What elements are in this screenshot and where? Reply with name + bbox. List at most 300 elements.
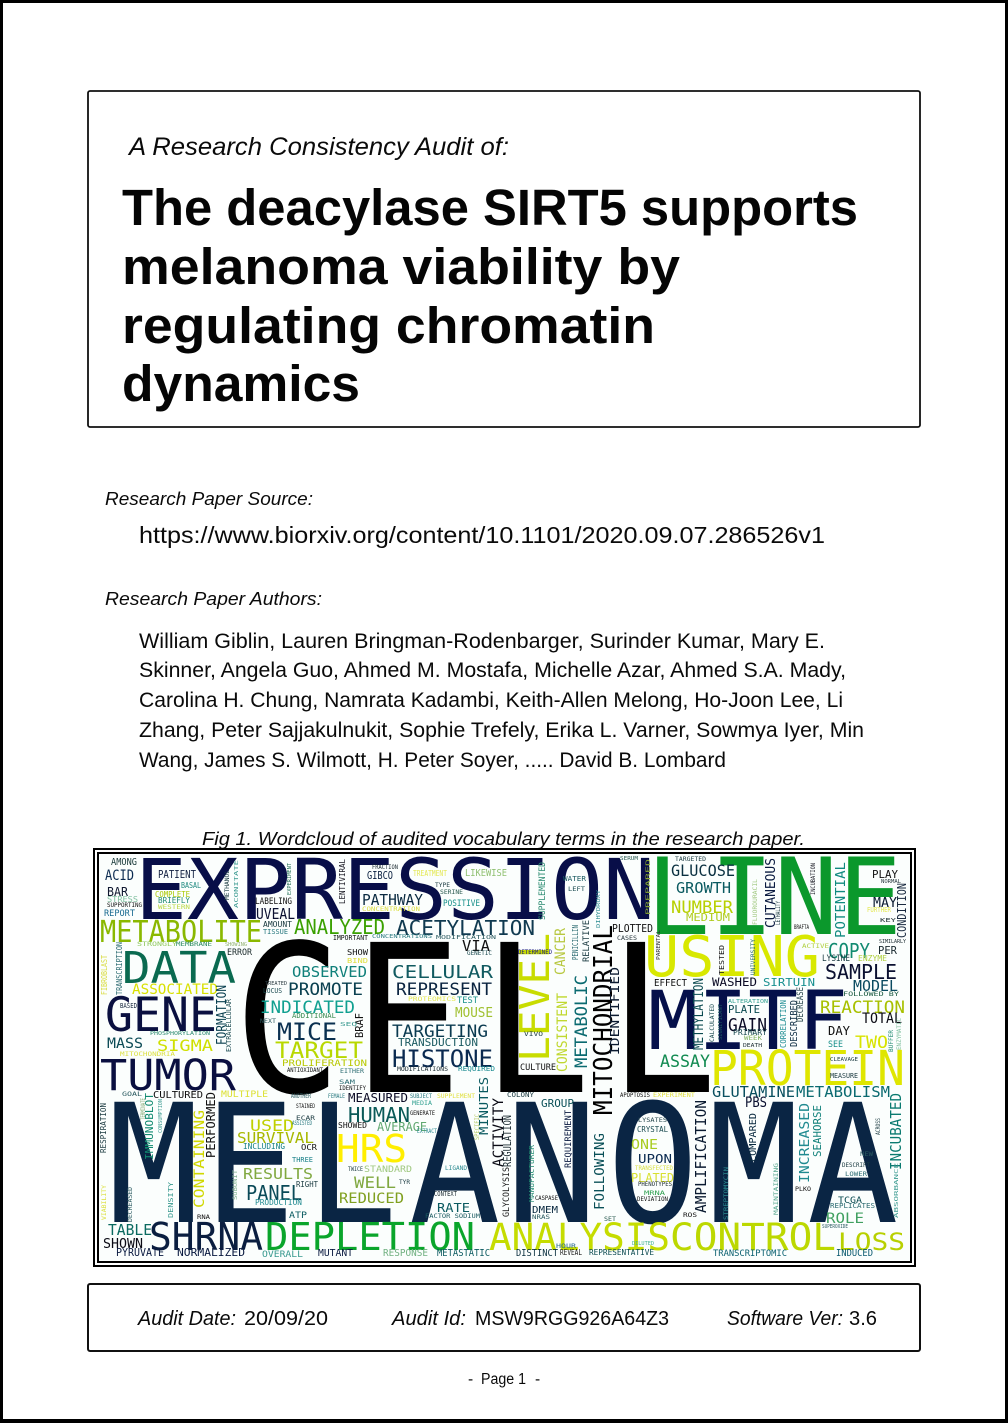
medium horizontal vocabulary terms: OBSERVED — [292, 963, 367, 981]
small vocabulary terms: ANTIOXIDANT — [287, 1066, 323, 1074]
small vocabulary terms: ALTERATION — [728, 999, 768, 1005]
page number: - — [535, 1371, 540, 1388]
medium horizontal vocabulary terms: CRYSTAL — [637, 1125, 668, 1134]
medium horizontal vocabulary terms: POSITIVE — [443, 899, 480, 909]
vertical vocabulary terms: ABSORBANCE — [894, 1163, 900, 1218]
audit date: Audit Date: — [137, 1308, 236, 1330]
small vocabulary terms: TWICE — [348, 1166, 363, 1173]
medium horizontal vocabulary terms: NORMALIZED — [177, 1246, 245, 1259]
medium horizontal vocabulary terms: INDUCED — [836, 1248, 873, 1259]
word: GENE: GENE — [105, 988, 217, 1043]
small vocabulary terms: REPORT — [104, 909, 135, 919]
medium horizontal vocabulary terms: CULTURED — [153, 1090, 203, 1101]
medium horizontal vocabulary terms: TARGETING — [392, 1022, 488, 1042]
medium horizontal vocabulary terms: PER — [878, 944, 897, 957]
word: DATA: DATA — [122, 943, 236, 994]
medium horizontal vocabulary terms: TRANSCRIPTOMIC — [713, 1249, 787, 1259]
medium horizontal vocabulary terms: STANDARD — [364, 1165, 412, 1175]
vertical vocabulary terms: VIABILITY — [101, 1185, 108, 1220]
vertical vocabulary terms: FIBROBLAST — [100, 955, 109, 995]
small vocabulary terms: SUPPLEMENT — [437, 1093, 475, 1100]
small vocabulary terms: ROS — [683, 1212, 697, 1219]
word: CELL: CELL — [233, 901, 717, 1141]
panel: title box — [88, 91, 920, 427]
small vocabulary terms: SHOW — [347, 948, 369, 957]
vertical vocabulary terms: FLUOROURACIL — [751, 879, 759, 925]
medium horizontal vocabulary terms: PROLIFERATION — [282, 1059, 367, 1069]
vertical vocabulary terms: ENZYMATIC — [896, 1018, 903, 1050]
vertical vocabulary terms: RELATIVE — [582, 920, 592, 962]
small vocabulary terms: DEATH — [743, 1043, 762, 1049]
vertical vocabulary terms: GLYCOLYSIS — [502, 1167, 512, 1217]
vertical vocabulary terms: IDENTIFIED — [608, 967, 622, 1055]
medium horizontal vocabulary terms: RNA — [197, 1214, 210, 1221]
small vocabulary terms: AMONG — [111, 857, 137, 868]
small vocabulary terms: AMOUNT — [263, 920, 293, 929]
medium horizontal vocabulary terms: COPY — [828, 939, 870, 963]
vertical vocabulary terms: LENTIVIRAL — [338, 859, 347, 904]
medium horizontal vocabulary terms: PATHWAY — [362, 891, 423, 909]
medium horizontal vocabulary terms: REPRESENTATIVE — [589, 1248, 654, 1257]
small vocabulary terms: STRONGLY — [137, 941, 178, 948]
small vocabulary terms: CLEAVAGE — [830, 1057, 858, 1063]
medium horizontal vocabulary terms: RATE — [437, 1201, 470, 1215]
medium horizontal vocabulary terms: VIA — [462, 937, 490, 955]
small vocabulary terms: FURTHER — [867, 906, 892, 914]
chart: word cloud of audited vocabulary terms — [94, 836, 915, 1266]
small vocabulary terms: WEEK — [744, 1035, 762, 1042]
medium horizontal vocabulary terms: PRODUCTION — [255, 1198, 302, 1207]
small vocabulary terms: ASSISTED — [292, 1120, 312, 1127]
medium horizontal vocabulary terms: DMEM — [532, 1205, 558, 1216]
small vocabulary terms: TREATMENT — [413, 869, 447, 878]
medium horizontal vocabulary terms: TCGA — [838, 1196, 863, 1206]
vertical vocabulary terms: LETHALITY — [775, 901, 782, 925]
word: MITF: MITF — [648, 975, 848, 1069]
small vocabulary terms: TISSUE — [263, 928, 288, 936]
vertical vocabulary terms: METHANOL — [224, 870, 231, 900]
word: MELANOMA: MELANOMA — [108, 1070, 898, 1262]
small vocabulary terms: COMPLETE — [155, 890, 190, 899]
small vocabulary terms: FRACTION — [372, 864, 398, 871]
text: author list: Skinner, Angela Guo, Ahmed M. Mostafa, Michelle Azar, Ahmed S.A. Mady, — [139, 659, 846, 682]
small vocabulary terms: IMPORTANT — [333, 934, 369, 942]
medium horizontal vocabulary terms: GROUP — [541, 1097, 574, 1110]
medium horizontal vocabulary terms: SAMPLE — [825, 960, 897, 984]
medium horizontal vocabulary terms: LYSINE — [822, 954, 850, 964]
panel: audit metadata footer — [88, 1284, 920, 1351]
vertical vocabulary terms: METABOLIC — [572, 975, 592, 1068]
small vocabulary terms: DILUTED — [632, 1241, 654, 1247]
medium horizontal vocabulary terms: MULTIPLE — [221, 1090, 268, 1100]
small vocabulary terms: SEQ — [340, 1022, 357, 1028]
small vocabulary terms: BASAL — [181, 881, 201, 890]
text: author list: Wang, James S. Wilmott, H. Peter Soyer, ..... David B. Lombard — [139, 749, 726, 772]
vertical vocabulary terms: SUBUNIT — [232, 1170, 239, 1200]
label: research paper authors: Research Paper Authors: — [105, 588, 322, 609]
vertical vocabulary terms: COMPARED — [748, 1113, 759, 1162]
medium horizontal vocabulary terms: PANEL — [246, 1181, 302, 1205]
medium horizontal vocabulary terms: OCR — [301, 1143, 317, 1152]
small vocabulary terms: DEVIATION — [637, 1196, 668, 1203]
word: TUMOR: TUMOR — [100, 1051, 236, 1101]
word: EXPRESSION: EXPRESSION — [135, 841, 655, 939]
vertical vocabulary terms: EXTRACELLULAR — [225, 998, 233, 1052]
small vocabulary terms: TRANSFECTED — [635, 1165, 673, 1172]
vertical vocabulary terms: RESPIRATION — [99, 1103, 108, 1153]
audit id: MSW9RGG926A64Z3 — [475, 1308, 669, 1330]
small vocabulary terms: SIMILARLY — [879, 939, 907, 945]
heading: paper title: dynamics — [122, 355, 360, 412]
small vocabulary terms: PHENOTYPES — [638, 1181, 672, 1188]
vertical vocabulary terms: INCREASED — [798, 1103, 813, 1183]
medium horizontal vocabulary terms: ACID — [105, 868, 134, 884]
medium horizontal vocabulary terms: HISTONE — [392, 1045, 493, 1073]
vertical vocabulary terms: PARENTAL — [656, 929, 662, 960]
small vocabulary terms: SUBJECT — [410, 1093, 432, 1100]
small vocabulary terms: WATER — [563, 875, 587, 883]
small vocabulary terms: EITHER — [340, 1068, 364, 1075]
figure caption: Fig 1. Wordcloud of audited vocabulary terms in the research paper. — [202, 828, 805, 849]
word: LOSS: LOSS — [838, 1228, 905, 1256]
small vocabulary terms: TREATED — [265, 981, 287, 987]
medium horizontal vocabulary terms — [103, 861, 905, 1260]
small vocabulary terms: MEASURE — [830, 1072, 858, 1080]
word: CONTROL: CONTROL — [670, 1216, 836, 1259]
medium horizontal vocabulary terms: THREE — [292, 1156, 313, 1164]
medium horizontal vocabulary terms: REDUCED — [339, 1191, 404, 1207]
medium horizontal vocabulary terms: PRIMARY — [733, 1028, 767, 1037]
text: author list — [139, 630, 864, 772]
small vocabulary terms: BIND — [347, 957, 368, 965]
medium horizontal vocabulary terms: GLUCOSE — [671, 861, 735, 880]
medium horizontal vocabulary terms: CELLULAR — [392, 962, 493, 983]
vertical vocabulary terms: BRAF — [353, 1013, 366, 1038]
small vocabulary terms: MODIFICATION — [436, 935, 496, 941]
medium horizontal vocabulary terms: ASSOCIATED — [132, 982, 218, 998]
vertical vocabulary terms: BUFFER — [888, 1030, 895, 1052]
medium horizontal vocabulary terms: MAY — [873, 896, 897, 911]
small vocabulary terms: HOUR — [556, 1243, 577, 1250]
small vocabulary terms: SERUM — [620, 856, 639, 862]
small vocabulary terms: GENETIC — [467, 950, 492, 957]
medium horizontal vocabulary terms: MEDIUM — [686, 911, 730, 924]
subtitle: audit label: A Research Consistency Audit of: — [127, 133, 509, 161]
medium horizontal vocabulary terms: TABLE — [108, 1221, 152, 1239]
small vocabulary terms: LYSATES — [638, 1116, 667, 1124]
word: HRS: HRS — [336, 1127, 407, 1171]
page number — [468, 1371, 540, 1388]
small vocabulary terms: STRESS — [107, 895, 138, 904]
vertical vocabulary terms: CUTANEOUS — [764, 858, 779, 928]
medium horizontal vocabulary terms: PATIENT — [158, 868, 196, 881]
small vocabulary terms: MITOCHONDRIA — [120, 1050, 175, 1058]
medium horizontal vocabulary terms: COLONY — [507, 1091, 535, 1099]
medium horizontal vocabulary terms: PLAY — [872, 868, 898, 881]
vertical vocabulary terms: EXPERIMENT — [287, 862, 293, 895]
small vocabulary terms: MODIFICATIONS — [397, 1066, 448, 1073]
word: METABOLITE: METABOLITE — [100, 915, 262, 950]
audit id: Audit Id: — [391, 1308, 466, 1330]
vertical vocabulary terms: TERMINATE — [140, 1098, 147, 1120]
medium horizontal vocabulary terms: RESPONSE — [383, 1248, 428, 1259]
medium horizontal vocabulary terms: ROLE — [826, 1211, 864, 1227]
page number: - — [468, 1371, 473, 1388]
small vocabulary terms: NEW — [860, 1151, 873, 1158]
medium horizontal vocabulary terms: ACETYLATION — [396, 916, 535, 940]
medium horizontal vocabulary terms: PYRUVATE — [116, 1246, 164, 1259]
medium horizontal vocabulary terms: BAR — [107, 885, 129, 899]
medium horizontal vocabulary terms: SHOWED — [338, 1121, 367, 1130]
vertical vocabulary terms: FOLLOWING — [593, 1133, 608, 1210]
medium horizontal vocabulary terms: SIGMA — [157, 1036, 213, 1055]
vertical vocabulary terms: DENSITY — [167, 1181, 175, 1218]
small vocabulary terms: BASED — [120, 1002, 137, 1010]
small vocabulary terms: ADDITIONAL — [292, 1012, 336, 1020]
word: USING: USING — [644, 925, 820, 990]
medium horizontal vocabulary terms: MASS — [107, 1036, 143, 1052]
medium horizontal vocabulary terms: SIRTUIN — [763, 976, 815, 989]
heading: paper title — [122, 179, 858, 412]
small vocabulary terms: EXTRACT — [417, 1128, 437, 1135]
small vocabulary terms: MEDIA — [412, 1099, 432, 1107]
medium horizontal vocabulary terms: PROMOTE — [288, 980, 363, 1000]
medium horizontal vocabulary terms: RIGHT — [296, 1180, 318, 1189]
small vocabulary terms: PLKO — [795, 1186, 811, 1193]
word: LINE: LINE — [646, 836, 902, 959]
vertical vocabulary terms: SIGNIFICANT — [718, 1003, 724, 1040]
medium horizontal vocabulary terms: GIBCO — [367, 869, 393, 882]
small vocabulary terms: LOWER — [845, 1171, 867, 1178]
vertical vocabulary terms: DIHYDROXY — [596, 889, 602, 928]
medium horizontal vocabulary terms: RESULTS — [243, 1165, 313, 1183]
medium horizontal vocabulary terms: ANALYZED — [294, 915, 385, 939]
medium horizontal vocabulary terms: ENZYME — [858, 954, 887, 963]
medium horizontal vocabulary terms: METABOLISM — [796, 1083, 890, 1101]
small vocabulary terms: SAM — [339, 1078, 355, 1086]
medium horizontal vocabulary terms: AVERAGE — [377, 1120, 427, 1134]
small vocabulary terms: DETERMINED — [518, 949, 552, 956]
word: MITOCHONDRIAL: MITOCHONDRIAL — [589, 925, 619, 1115]
small vocabulary terms — [104, 856, 907, 1250]
vertical vocabulary terms: REQUIREMENT — [564, 1109, 574, 1168]
word: LEVEL: LEVEL — [511, 933, 559, 1062]
small vocabulary terms: BRIEFLY — [158, 896, 190, 905]
small vocabulary terms: CONCENTRATION — [362, 905, 420, 913]
software version: 3.6 — [849, 1308, 877, 1330]
medium horizontal vocabulary terms: MOUSE — [455, 1006, 493, 1021]
medium horizontal vocabulary terms: MODEL — [853, 977, 898, 995]
medium horizontal vocabulary terms: GLUTAMINE — [712, 1083, 795, 1101]
medium horizontal vocabulary terms: UVEAL — [256, 905, 295, 923]
medium horizontal vocabulary terms: CULTURE — [520, 1063, 556, 1073]
small vocabulary terms: EXPERIMENT — [653, 1091, 695, 1099]
vertical vocabulary terms: AMPLIFICATION — [692, 1100, 710, 1213]
vertical vocabulary terms: SUPPLEMENTED — [538, 862, 548, 920]
medium horizontal vocabulary terms: ASSAY — [660, 1052, 710, 1072]
medium horizontal vocabulary terms: OVERALL — [262, 1250, 303, 1260]
medium horizontal vocabulary terms: TOTAL — [862, 1011, 902, 1027]
text: author list: William Giblin, Lauren Bringman-Rodenbarger, Surinder Kumar, Mary E. — [139, 630, 825, 653]
small vocabulary terms: MRNA — [644, 1190, 666, 1197]
small vocabulary terms: SUPPORTING — [107, 901, 142, 909]
medium horizontal vocabulary terms: GAIN — [728, 1015, 767, 1036]
medium horizontal vocabulary terms: REVEAL — [560, 1248, 582, 1257]
small vocabulary terms: NORMAL — [881, 879, 902, 885]
vertical vocabulary terms: TESTED — [718, 945, 726, 975]
audit date: 20/09/20 — [244, 1308, 328, 1330]
vertical vocabulary terms — [99, 858, 909, 1222]
medium horizontal vocabulary terms: NUMBER — [671, 898, 734, 918]
vertical vocabulary terms: STREPTOMYCIN — [723, 1167, 730, 1220]
medium horizontal vocabulary terms: INCLUDING — [243, 1142, 285, 1151]
small vocabulary terms: BRAFTA — [794, 924, 809, 931]
small vocabulary terms: LEFT — [568, 885, 585, 893]
small vocabulary terms: MEMBRANE — [176, 941, 212, 948]
small vocabulary terms: PROTEOMICS — [408, 995, 456, 1003]
medium horizontal vocabulary terms: PLATE — [728, 1003, 760, 1016]
vertical vocabulary terms: CONDITION — [895, 883, 909, 938]
vertical vocabulary terms: PERFORMED — [204, 1092, 218, 1158]
small vocabulary terms: FOLLOWED BY — [843, 991, 900, 998]
medium horizontal vocabulary terms: SURVIVAL — [237, 1129, 314, 1147]
vertical vocabulary terms: PREPARED — [644, 859, 652, 915]
vertical vocabulary terms: DESCRIBED — [789, 1000, 800, 1047]
medium horizontal vocabulary terms: ERROR — [227, 948, 253, 958]
small vocabulary terms: DESCRIPT — [842, 1162, 870, 1169]
medium horizontal vocabulary terms: REPRESENT — [396, 980, 492, 1000]
medium horizontal vocabulary terms: SEE — [828, 1040, 843, 1050]
small vocabulary terms: REQUIRED — [458, 1065, 495, 1073]
vertical vocabulary terms: DECREASED — [127, 1187, 134, 1222]
medium horizontal vocabulary terms: REACTION — [820, 998, 905, 1018]
medium horizontal vocabulary terms: PLOTTED — [612, 922, 653, 935]
medium horizontal vocabulary terms: MUTANT — [318, 1248, 353, 1259]
medium horizontal vocabulary terms: REPLICATES — [830, 1202, 875, 1210]
medium horizontal vocabulary terms: WELL — [354, 1173, 396, 1192]
small vocabulary terms: CASPASE — [535, 1195, 558, 1202]
small vocabulary terms: SUPEROXIDE — [822, 1224, 848, 1230]
small vocabulary terms: APOPTOSIS — [620, 1091, 650, 1099]
vertical vocabulary terms: PENICILLIN — [571, 925, 580, 960]
vertical vocabulary terms: CANCER — [553, 927, 569, 975]
vertical vocabulary terms: UNIVERSITY — [750, 939, 757, 975]
medium horizontal vocabulary terms: DAY — [828, 1024, 851, 1038]
medium horizontal vocabulary terms: WASHED — [712, 975, 757, 989]
small vocabulary terms: CONCENTRATIONS — [372, 934, 432, 940]
vertical vocabulary terms: MAINTAINING — [773, 1163, 780, 1215]
vertical vocabulary terms: REGULATION — [501, 1115, 514, 1167]
vertical vocabulary terms: CONTAINING — [192, 1110, 208, 1208]
small vocabulary terms: TYPE — [435, 882, 450, 889]
vertical vocabulary terms: ACTIVITY — [491, 1097, 507, 1167]
audit id — [391, 1308, 669, 1330]
medium horizontal vocabulary terms: USED — [250, 1116, 294, 1135]
small vocabulary terms: LIGAND — [445, 1165, 467, 1172]
small vocabulary terms: STAINED — [296, 1103, 315, 1110]
medium horizontal vocabulary terms: ONE — [631, 1138, 658, 1153]
medium horizontal vocabulary terms: SHOWN — [103, 1237, 143, 1252]
medium horizontal vocabulary terms: TRANSDUCTION — [398, 1036, 478, 1049]
vertical vocabulary terms: CONSISTENT — [555, 992, 571, 1072]
medium horizontal vocabulary terms: MICE — [277, 1018, 337, 1046]
medium horizontal vocabulary terms: LABELING — [255, 897, 292, 907]
label: research paper source: Research Paper Source: — [105, 488, 313, 509]
medium horizontal vocabulary terms: UPON — [638, 1152, 672, 1166]
medium horizontal vocabulary terms: METASTATIC — [437, 1248, 490, 1259]
medium horizontal vocabulary terms: HUMAN — [348, 1103, 410, 1127]
medium horizontal vocabulary terms: INDICATED — [260, 998, 355, 1018]
medium horizontal vocabulary terms: CONTEXT — [434, 1190, 458, 1198]
small vocabulary terms: TARGETED — [675, 856, 706, 863]
small vocabulary terms: NRAS — [532, 1213, 550, 1221]
text: author list: Zhang, Peter Sajjakulnukit, Sophie Trefely, Erika L. Varner, Sowmya Iyer, Min — [139, 719, 864, 742]
small vocabulary terms: CASES — [617, 935, 637, 942]
vertical vocabulary terms: POTENTIAL — [834, 862, 849, 938]
small vocabulary terms: VIVO — [524, 1030, 543, 1038]
small vocabulary terms: KEY — [880, 918, 897, 924]
vertical vocabulary terms: INCUBATED — [887, 1093, 905, 1170]
software version: Software Ver: — [727, 1308, 843, 1330]
word: ANALYSIS: ANALYSIS — [489, 1216, 670, 1259]
vertical vocabulary terms: ACROSS — [875, 1118, 882, 1135]
medium horizontal vocabulary terms: EFFECT — [654, 978, 687, 989]
audit date — [137, 1308, 328, 1330]
vertical vocabulary terms: DECREASE — [796, 987, 806, 1022]
vertical vocabulary terms: TRANSCRIPTION — [115, 942, 124, 995]
small vocabulary terms: WESTERN — [158, 904, 190, 911]
vertical vocabulary terms: CONSUMPTION — [158, 1099, 164, 1133]
medium horizontal vocabulary terms: PBS — [745, 1095, 767, 1111]
small vocabulary terms: SERINE — [440, 888, 463, 896]
vertical vocabulary terms: IMMUNOBLOT — [143, 1093, 156, 1160]
page number: Page 1 — [481, 1371, 526, 1388]
vertical vocabulary terms: INCUBATION — [810, 863, 817, 895]
small vocabulary terms: GOAL — [122, 1091, 143, 1098]
small vocabulary terms: ACTIVE — [802, 943, 829, 950]
heading: paper title: The deacylase SIRT5 supports — [122, 179, 858, 236]
vertical vocabulary terms: MINUTES — [477, 1077, 491, 1135]
small vocabulary terms: GENERATE — [410, 1110, 435, 1117]
medium horizontal vocabulary terms: GROWTH — [676, 879, 731, 897]
small vocabulary terms: LOCUS — [263, 987, 282, 995]
small vocabulary terms: SHOWING — [225, 942, 247, 948]
medium horizontal vocabulary terms: ATP — [289, 1211, 308, 1221]
small vocabulary terms: SET — [604, 1216, 616, 1223]
word: SHRNA: SHRNA — [149, 1215, 263, 1259]
heading: paper title: melanoma viability by — [122, 238, 681, 295]
medium horizontal vocabulary terms: TEST — [457, 996, 479, 1006]
small vocabulary terms: NEXT — [260, 1018, 276, 1025]
vertical vocabulary terms: SPECIFIC — [474, 1114, 481, 1140]
text: source url: https://www.biorxiv.org/content/10.1101/2020.09.07.286526v1 — [139, 522, 825, 548]
vertical vocabulary terms: CALCULATED — [709, 1004, 716, 1042]
word: DEPLETION: DEPLETION — [265, 1215, 475, 1259]
small vocabulary terms: TYR — [399, 1179, 410, 1186]
medium horizontal vocabulary terms: MEASURED — [348, 1091, 408, 1105]
heading: paper title: regulating chromatin — [122, 297, 655, 354]
small vocabulary terms: ECAR — [296, 1115, 316, 1122]
small vocabulary terms: ANOTHER — [291, 1093, 311, 1100]
vertical vocabulary terms: METHYLATION — [692, 978, 707, 1050]
vertical vocabulary terms: FORMATION — [215, 985, 230, 1045]
vertical vocabulary terms: SEAHORSE — [811, 1105, 824, 1157]
small vocabulary terms: FEMALE — [328, 1093, 345, 1100]
medium horizontal vocabulary terms: LIKEWISE — [465, 868, 507, 879]
medium horizontal vocabulary terms: FACTOR SODIUM — [425, 1213, 480, 1220]
vertical vocabulary terms: MANUFACTURER — [528, 1144, 536, 1202]
medium horizontal vocabulary terms: TARGET — [275, 1039, 363, 1064]
